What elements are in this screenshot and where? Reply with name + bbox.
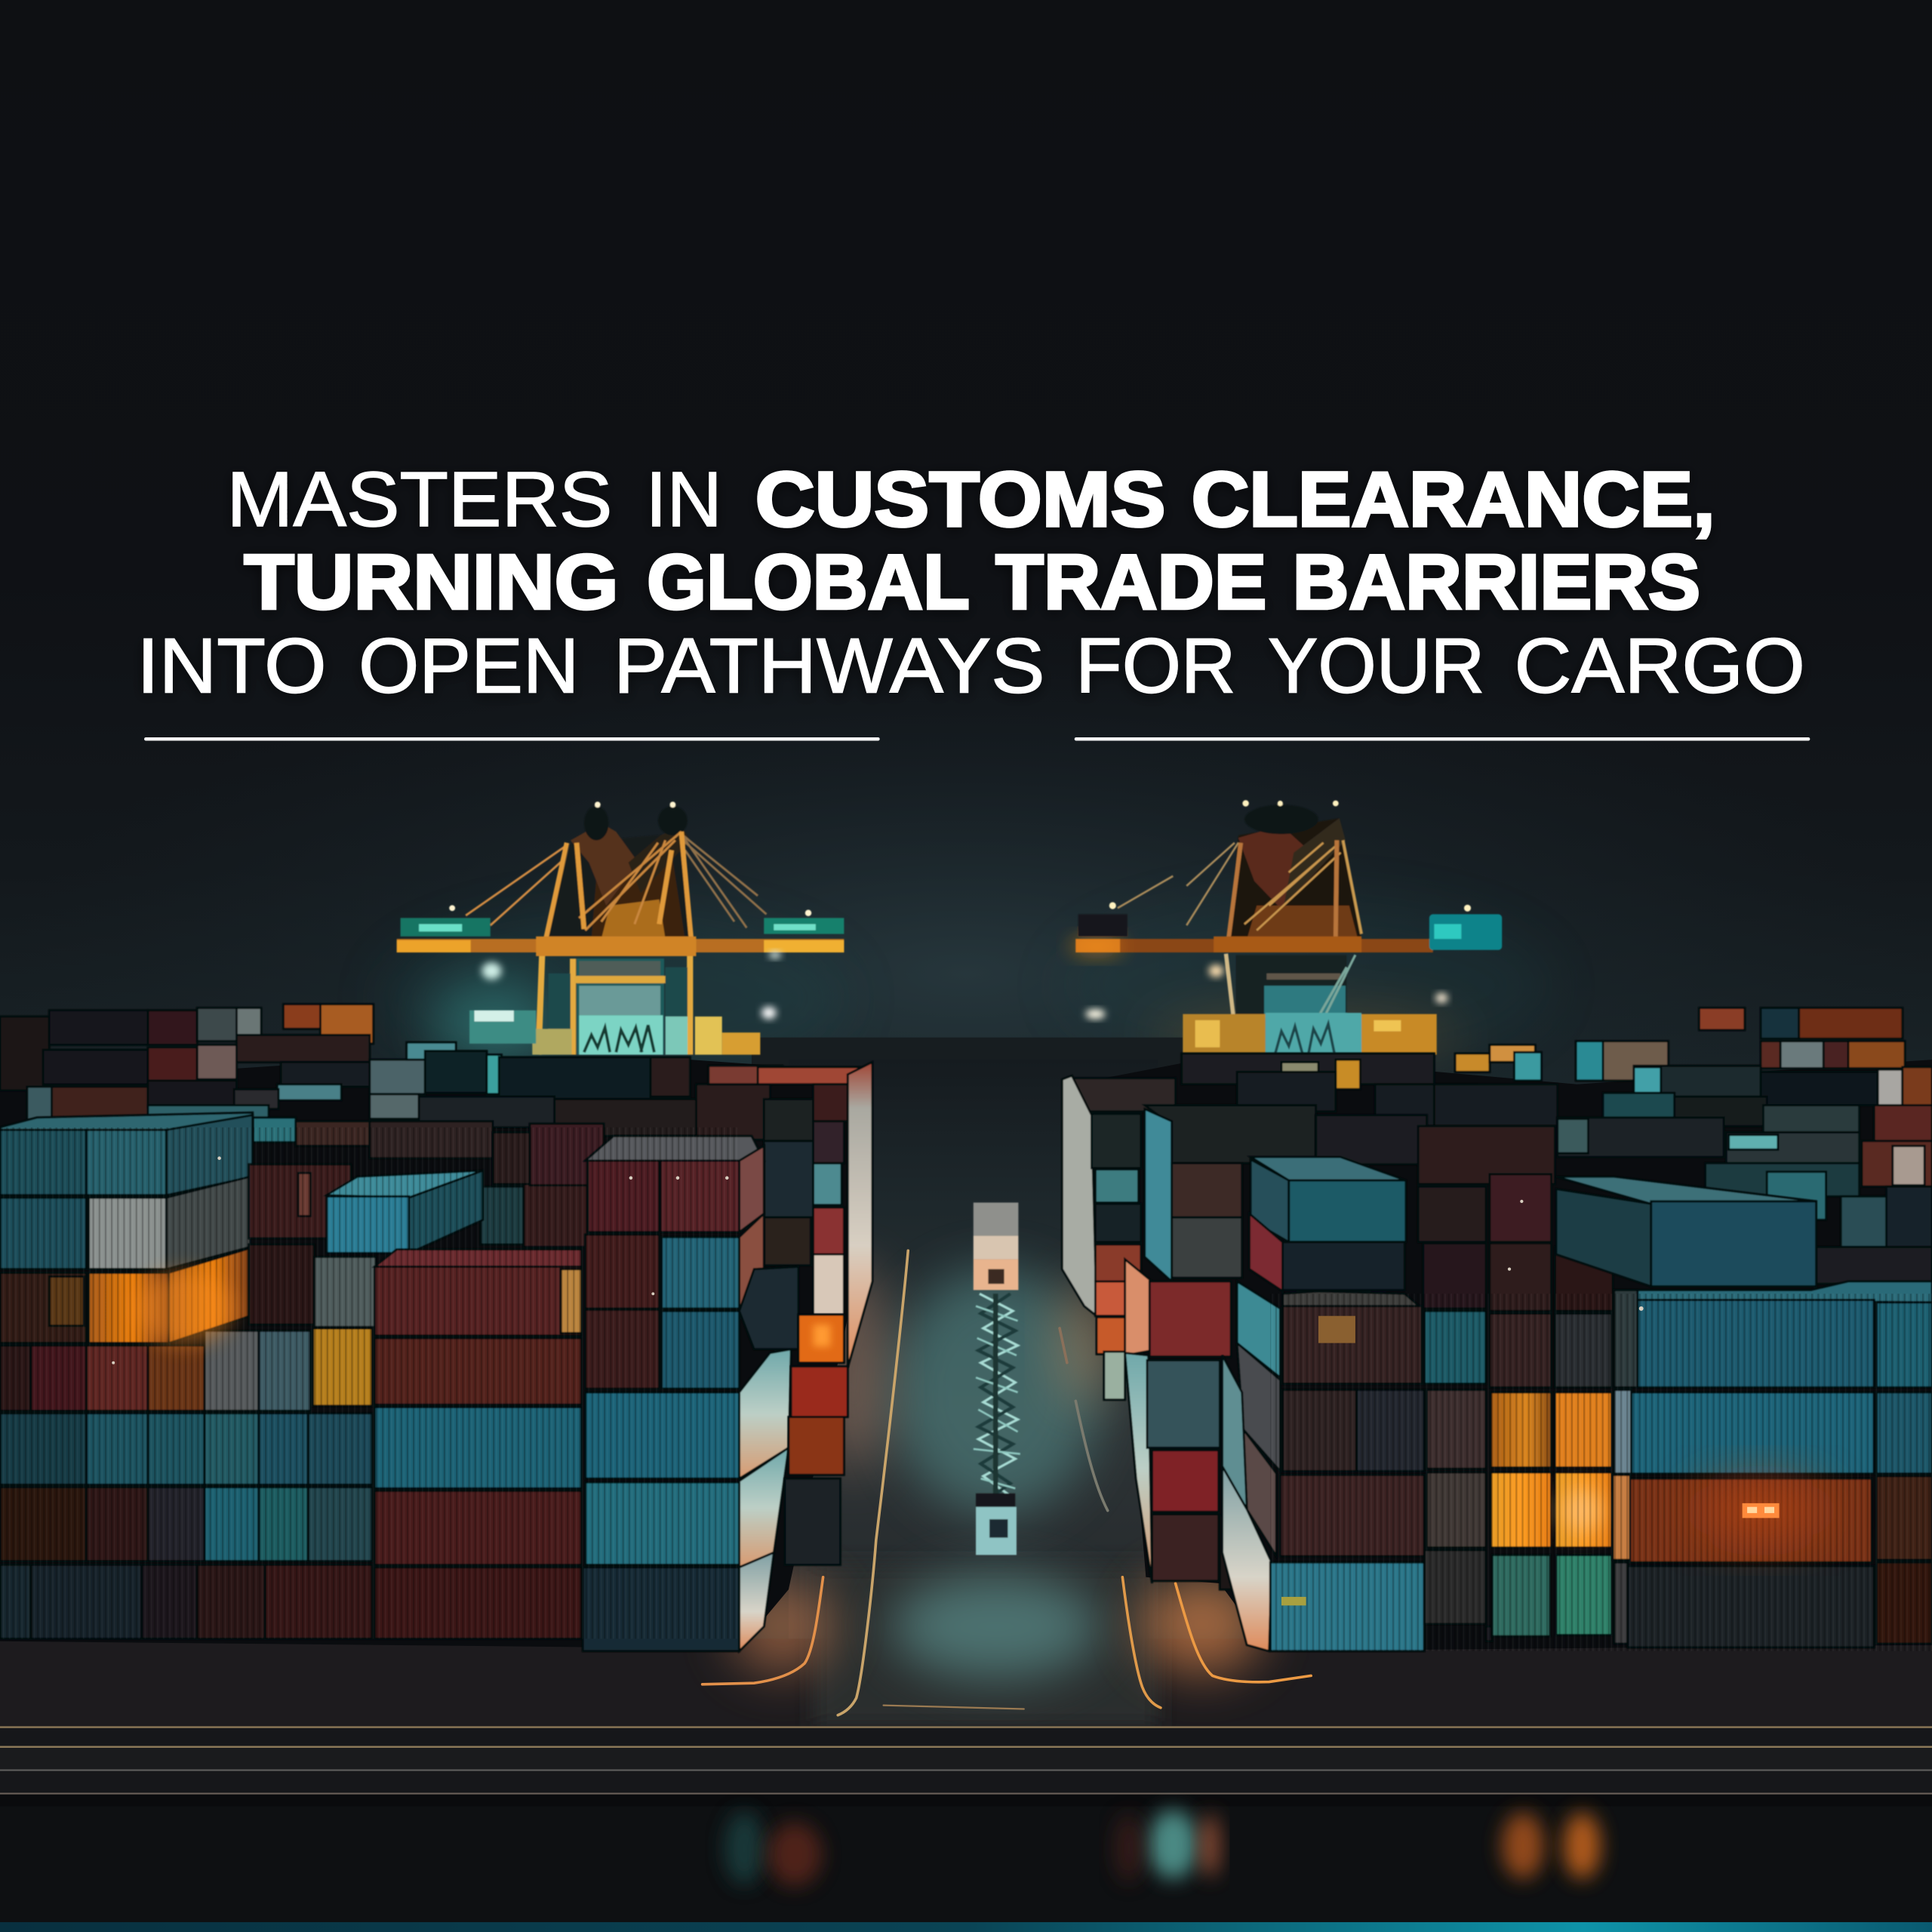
left crane cabin xyxy=(577,958,664,1055)
left crane trolley cabins xyxy=(401,918,491,937)
divider rules xyxy=(144,737,1810,741)
left road-side containers xyxy=(785,1315,848,1564)
container door windows and lights xyxy=(112,1156,1829,1605)
left back container yard xyxy=(0,1004,872,1367)
headline line 2: GLOBAL xyxy=(647,539,970,626)
left crane boom xyxy=(397,939,844,952)
headline line 1 xyxy=(226,456,1715,543)
headline xyxy=(137,456,1805,709)
right big teal containers xyxy=(1556,1177,1932,1647)
headline line 3: OPEN xyxy=(358,623,579,709)
left row three xyxy=(0,1273,86,1343)
road between the container stacks xyxy=(789,1060,1158,1651)
headline line 3: PATHWAYS xyxy=(614,623,1044,709)
headline line 3 xyxy=(137,623,1805,709)
teal container block xyxy=(1251,1157,1406,1180)
left row five xyxy=(0,1414,86,1484)
left foreground container stack xyxy=(0,1112,372,1638)
headline line 3: FOR xyxy=(1075,623,1236,709)
headline line 1: CLEARANCE, xyxy=(1192,456,1715,543)
left crane frame xyxy=(546,833,691,939)
left yard backdrop xyxy=(0,1060,863,1648)
right crane cabin xyxy=(1236,955,1346,1017)
left row two xyxy=(0,1198,86,1269)
left roof tops xyxy=(0,1112,253,1131)
truck body xyxy=(974,1202,1018,1236)
headline line 1: MASTERS xyxy=(226,456,612,543)
corrugation texture xyxy=(0,1128,1932,1651)
left tall column xyxy=(583,1136,798,1651)
right far-side stack xyxy=(1062,1054,1558,1589)
side faces xyxy=(1237,1281,1280,1377)
right yard backdrop xyxy=(1072,1054,1932,1651)
sea at the horizon xyxy=(752,1038,1183,1075)
headline line 1: CUSTOMS xyxy=(755,456,1165,543)
left row four xyxy=(0,1346,31,1411)
right crane lights xyxy=(1109,800,1471,912)
teal container on top xyxy=(327,1171,483,1198)
right upper back containers xyxy=(1455,1008,1932,1284)
headline line 3: YOUR xyxy=(1268,623,1484,709)
glowing orange containers xyxy=(1491,1392,1612,1636)
teal strip at bottom edge xyxy=(0,1922,1932,1932)
center left column xyxy=(374,1250,582,1269)
right crane frame xyxy=(1229,818,1361,939)
left row seven xyxy=(0,1564,31,1638)
right crane gold block xyxy=(1183,1014,1266,1055)
headline line 3: INTO xyxy=(137,623,327,709)
left middle containers xyxy=(249,1124,604,1638)
right crane teal machinery xyxy=(1429,914,1502,950)
truck cab xyxy=(976,1494,1015,1508)
headline line 1: IN xyxy=(646,456,722,543)
road markings xyxy=(703,1251,1311,1715)
headline line 2: TURNING xyxy=(244,539,619,626)
headline line 3: CARGO xyxy=(1515,623,1805,709)
headline line 2: TRADE xyxy=(995,539,1266,626)
right crane boom xyxy=(1075,939,1433,952)
right main container stack xyxy=(1223,1115,1613,1651)
truck light truss xyxy=(974,1294,1020,1503)
rail tracks along the quay xyxy=(0,1726,1932,1806)
left row six xyxy=(0,1487,86,1561)
left row one xyxy=(0,1130,86,1195)
right gantry crane xyxy=(1069,800,1502,1055)
headline line 2: BARRIERS xyxy=(1293,539,1700,626)
quay ground xyxy=(0,1564,1932,1727)
left crane lights xyxy=(449,801,811,916)
headline line 2 xyxy=(244,539,1700,626)
left gantry crane xyxy=(397,801,844,1055)
left crane base blocks xyxy=(695,1017,722,1055)
water with reflections xyxy=(0,1806,1932,1924)
straddle truck with load xyxy=(974,1202,1020,1555)
